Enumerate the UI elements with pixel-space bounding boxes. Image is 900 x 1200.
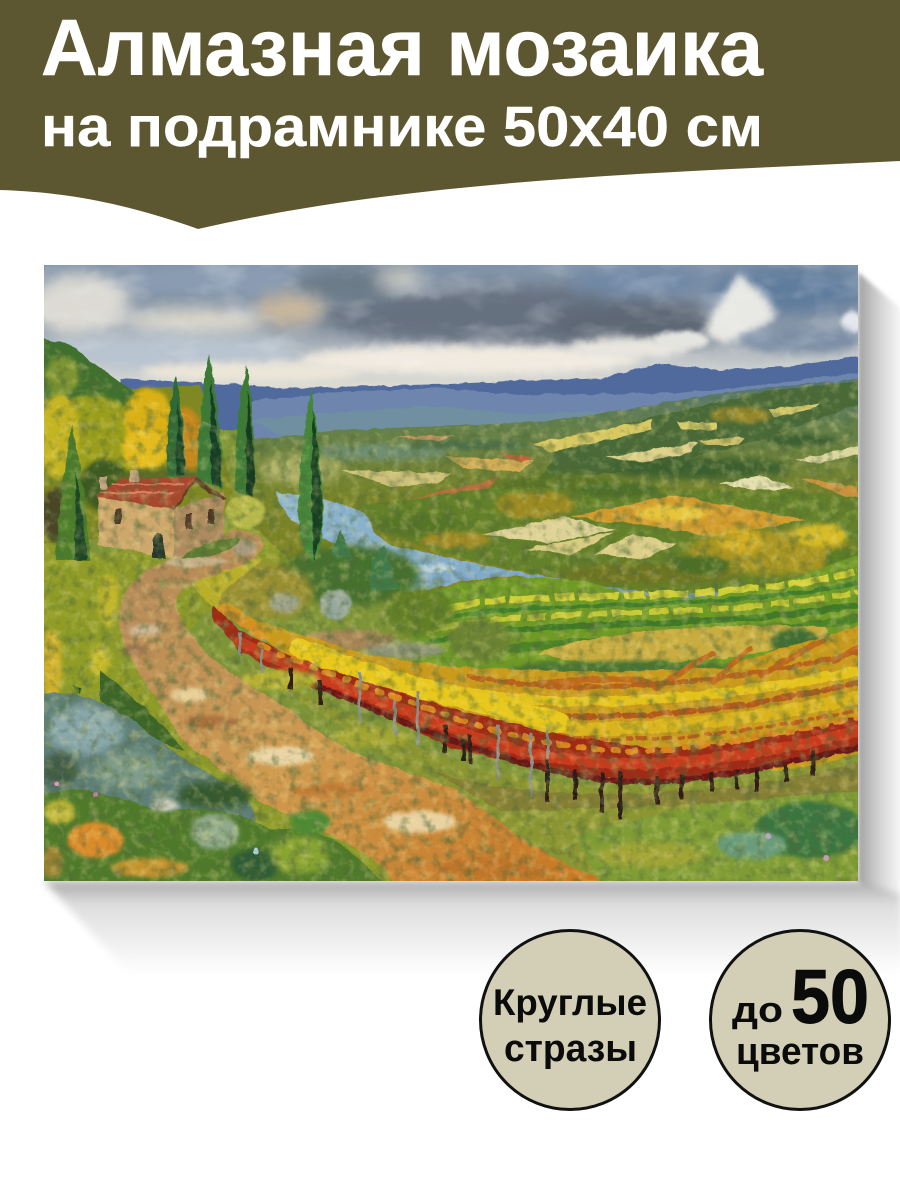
- badge text line 2: стразы: [504, 1028, 637, 1070]
- far rolling hills: [250, 378, 870, 600]
- badge text до: до: [732, 989, 783, 1030]
- red vine foliage band: [212, 605, 870, 782]
- title: [41, 3, 763, 159]
- river: [275, 492, 735, 599]
- title line 2: на подрамнике 50х40 см: [41, 95, 763, 159]
- bushes beside house: [225, 495, 265, 529]
- left grassy slope: [44, 526, 392, 881]
- dark treeline bands on hills: [257, 381, 858, 496]
- badge text цветов: цветов: [736, 1031, 864, 1073]
- left tree mass: [30, 335, 240, 545]
- title line 1: Алмазная мозаика: [41, 3, 763, 92]
- badge: up to 50 colours: [710, 930, 890, 1110]
- painterly speckle texture on land: [44, 340, 858, 881]
- badge: round rhinestones: [480, 930, 660, 1110]
- vineyard rows green: [412, 556, 858, 672]
- header banner: [0, 0, 900, 229]
- stone farmhouse: [96, 470, 240, 558]
- flower bushes lower left: [30, 782, 829, 890]
- painting: Tuscan vineyard landscape: [30, 255, 870, 900]
- foreground meadow: [211, 644, 858, 878]
- sky brush texture: [44, 265, 858, 365]
- badge number 50: 50: [791, 955, 869, 1040]
- dirt road: [119, 530, 610, 885]
- distant mountains: [120, 355, 870, 430]
- sky with clouds: [44, 265, 858, 390]
- badge text line 1: Круглые: [493, 982, 647, 1023]
- canvas shadow: [44, 272, 900, 975]
- sage bushes lower left: [30, 692, 255, 820]
- vineyard autumn rows: [220, 598, 870, 770]
- vine trunks and posts: [240, 632, 813, 820]
- central shrubs: [190, 530, 455, 658]
- hill field patches: [341, 403, 858, 503]
- left bright grass by road: [42, 560, 185, 750]
- cypress trees: [54, 354, 323, 695]
- near hill with golden fields: [360, 482, 870, 600]
